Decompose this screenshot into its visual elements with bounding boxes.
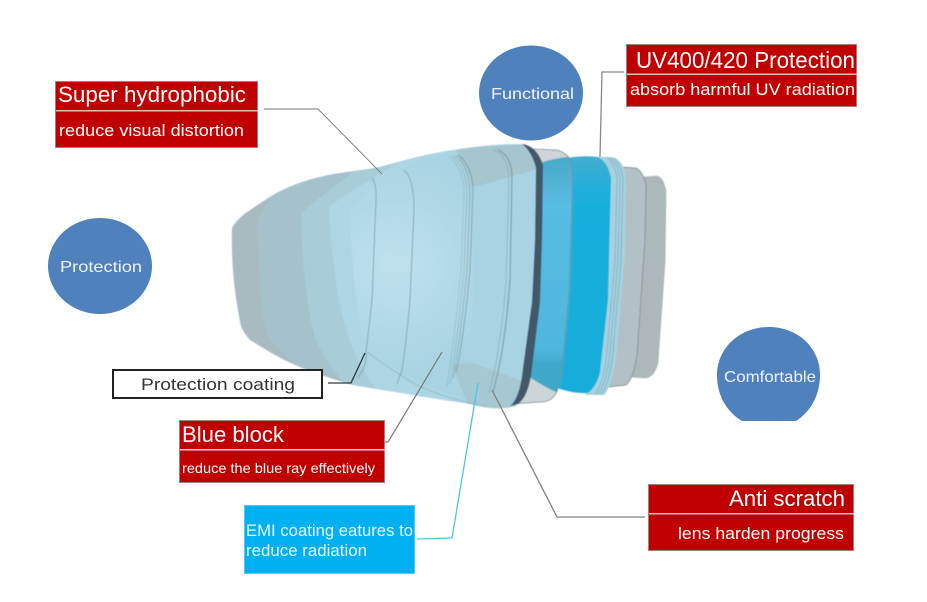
mid blue layer: [522, 157, 572, 392]
callout: UV400/420 Protection: absorb harmful UV radiation: [630, 80, 855, 99]
second grey lens: [600, 167, 646, 388]
fourth layer: [330, 150, 465, 402]
callout: Blue block: Blue block: [182, 422, 285, 447]
callout: Anti scratch: lens harden progress: [678, 524, 844, 543]
outermost grey layer: [231, 196, 343, 382]
main lens body: [353, 221, 438, 309]
callout: Protection coating: Protection coating: [141, 375, 295, 394]
callout: Protection coating: [113, 370, 322, 398]
callout: Blue block: reduce the blue ray effectively: [182, 460, 375, 476]
circle: Protection: Protection: [60, 259, 142, 276]
dark band layer: [510, 144, 543, 406]
thin stacked layers: [586, 157, 626, 395]
callout: EMI coating: [244, 506, 414, 574]
leader line: EMI coating: [417, 383, 478, 539]
leader line: blue block: [385, 352, 442, 442]
third layer: [301, 164, 394, 388]
right section top shade: [456, 145, 536, 187]
circle: Functional: Functional: [491, 86, 574, 103]
circle: Comfortable: [717, 327, 820, 421]
callout: Blue block: [180, 420, 385, 482]
callout: UV400/420 Protection: UV400/420 Protection: [636, 47, 855, 73]
callout: EMI coating: EMI coating eatures to: [246, 521, 413, 540]
lens edge lines: [357, 150, 512, 406]
clear grey lens: [512, 149, 573, 404]
callout: Super hydrophobic: [56, 82, 258, 148]
circle: Comfortable: Comfortable: [724, 369, 816, 386]
front lens stack: [231, 144, 536, 409]
callout: Super hydrophobic: reduce visual distortion: [59, 121, 244, 140]
lens layers illustration: [225, 130, 666, 420]
circle: Protection: [48, 218, 152, 314]
right section light: [474, 182, 494, 188]
bright blue UV layer: [552, 156, 611, 393]
callout: Super hydrophobic: Super hydrophobic: [58, 82, 246, 107]
callout: EMI coating: reduce radiation: [246, 541, 367, 560]
right section bottom shade: [453, 362, 521, 408]
circle: Functional: [479, 46, 583, 140]
callout: Anti scratch: [648, 484, 854, 550]
leader line: super hydrophobic: [264, 109, 382, 174]
callout: Anti scratch: Anti scratch: [729, 486, 845, 511]
leader line: UV protection: [600, 72, 624, 157]
leader line: protection coating: [328, 353, 365, 383]
callout: UV400/420 Protection: [626, 44, 857, 106]
rear grey lens: [630, 176, 666, 378]
leader line: anti scratch: [492, 390, 645, 517]
second layer: [258, 173, 349, 374]
